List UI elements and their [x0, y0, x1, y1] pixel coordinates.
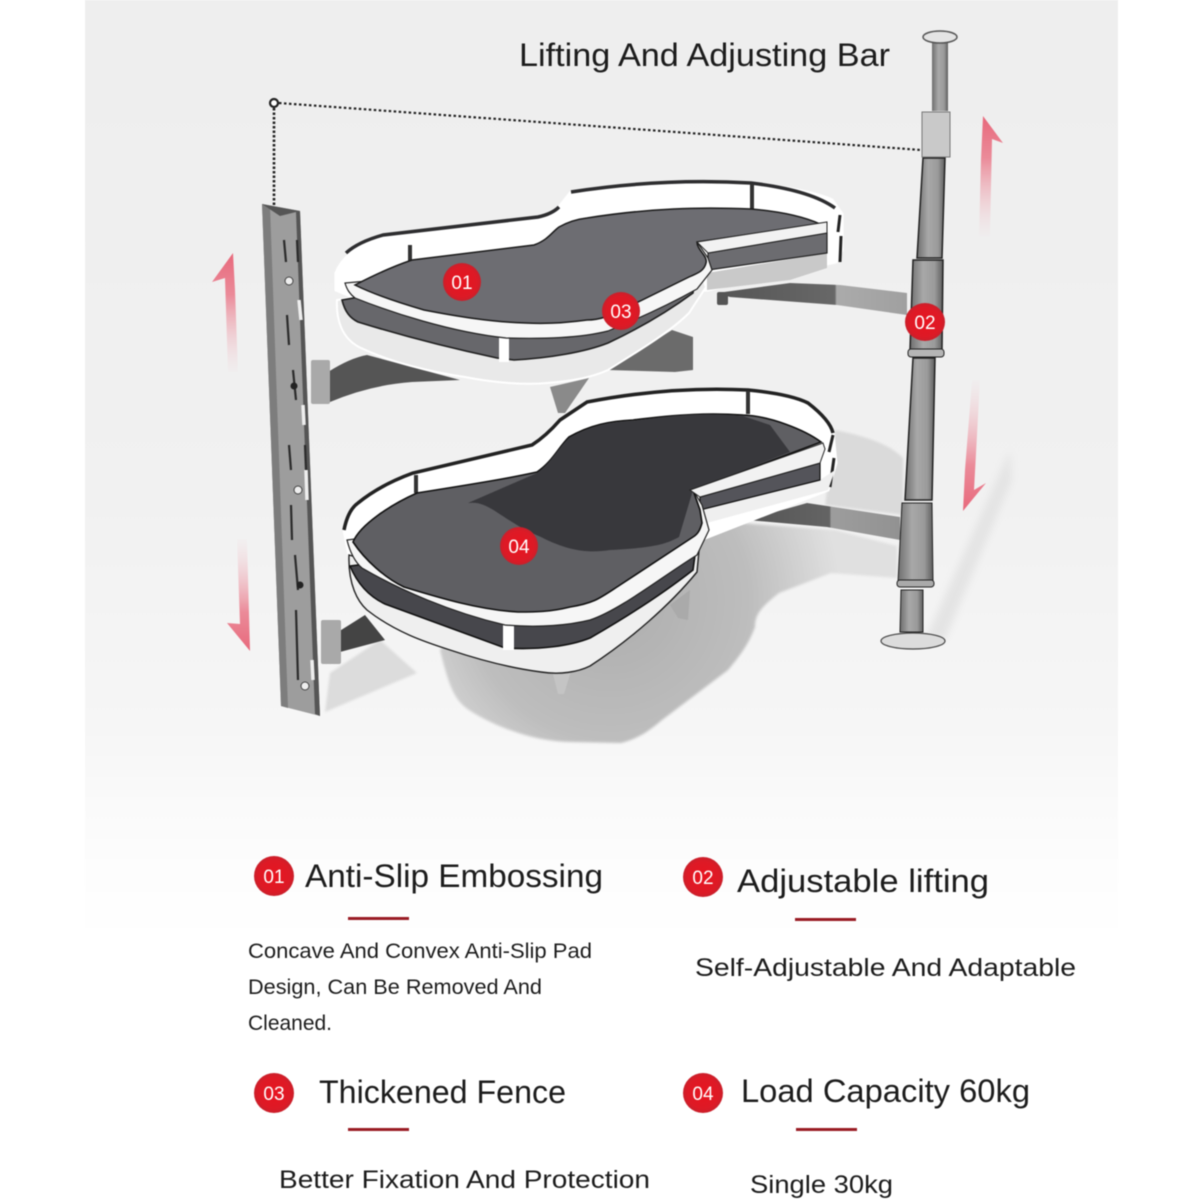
side rim — [697, 222, 827, 253]
description: Single 30kg — [750, 1171, 893, 1199]
feature: anti-slip embossing — [248, 856, 603, 1035]
seat dark reflection — [468, 414, 790, 551]
arm: lower right — [747, 503, 900, 540]
front rim — [347, 490, 709, 626]
feature: thickened fence — [254, 1073, 650, 1194]
description: Concave And Convex Anti-Slip Pad — [248, 940, 592, 963]
side rim — [690, 443, 825, 497]
feature: load capacity — [683, 1073, 1030, 1199]
dotted leader line — [270, 99, 921, 208]
badge 02 — [683, 857, 723, 897]
tray: upper — [336, 182, 842, 384]
badge 03: 03 — [263, 1084, 285, 1105]
bracket under upper tray — [608, 330, 693, 372]
bracket: upper left — [311, 355, 460, 404]
red rule — [348, 1128, 409, 1131]
arrow: left down — [227, 539, 250, 651]
front rim — [345, 242, 712, 338]
seat — [353, 414, 821, 612]
badge 01: 01 — [263, 867, 285, 888]
heading: Anti-Slip Embossing — [305, 858, 603, 894]
badge: 04 on tray: 04 — [508, 537, 530, 558]
description: Cleaned. — [248, 1012, 332, 1035]
heading: Adjustable lifting — [737, 863, 989, 899]
description: Design, Can Be Removed And — [248, 976, 542, 999]
left wall rail — [262, 204, 320, 716]
red rule — [795, 918, 856, 921]
badge 04 — [683, 1073, 723, 1113]
arm: upper right — [717, 283, 907, 315]
red rule — [796, 1128, 857, 1131]
right-hand side pieces — [707, 253, 827, 290]
badge: 01 on tray — [443, 263, 481, 301]
feature: adjustable lifting — [683, 857, 1076, 982]
description: Self-Adjustable And Adaptable — [695, 954, 1076, 982]
badge: 03 on tray: 03 — [610, 302, 632, 323]
tray: lower — [344, 389, 836, 694]
badge: 03 on tray — [602, 292, 640, 330]
rail back — [336, 182, 842, 300]
heading: Load Capacity 60kg — [741, 1073, 1030, 1109]
badge: 04 on tray — [500, 527, 538, 565]
title: Lifting And Adjusting Bar — [519, 37, 890, 73]
badge 03 — [254, 1073, 294, 1113]
dark lower band — [350, 540, 697, 649]
arrow: right up — [979, 116, 1003, 236]
floor shadows — [325, 430, 1012, 743]
bracket: lower left — [321, 615, 385, 664]
badge 04: 04 — [692, 1084, 714, 1105]
rail back — [344, 389, 836, 600]
badge: 01 on tray: 01 — [451, 273, 473, 294]
arrow: right down — [963, 380, 986, 511]
base shell — [337, 270, 706, 384]
badge 02: 02 — [692, 868, 714, 889]
arrow: left up — [212, 253, 238, 372]
description — [248, 940, 592, 1035]
badge 01 — [254, 856, 294, 896]
legs — [552, 668, 572, 694]
red rule — [348, 917, 409, 920]
base shell — [349, 540, 700, 673]
description: Better Fixation And Protection — [279, 1166, 650, 1194]
seat — [355, 208, 820, 323]
cone foot between trays — [550, 378, 589, 413]
dark lower band — [342, 270, 695, 360]
badge: 02 on pole — [905, 303, 945, 341]
heading: Thickened Fence — [319, 1074, 566, 1110]
badge: 02 on pole: 02 — [914, 313, 936, 334]
right-hand side pieces — [700, 470, 835, 524]
adjusting pole — [881, 31, 957, 649]
